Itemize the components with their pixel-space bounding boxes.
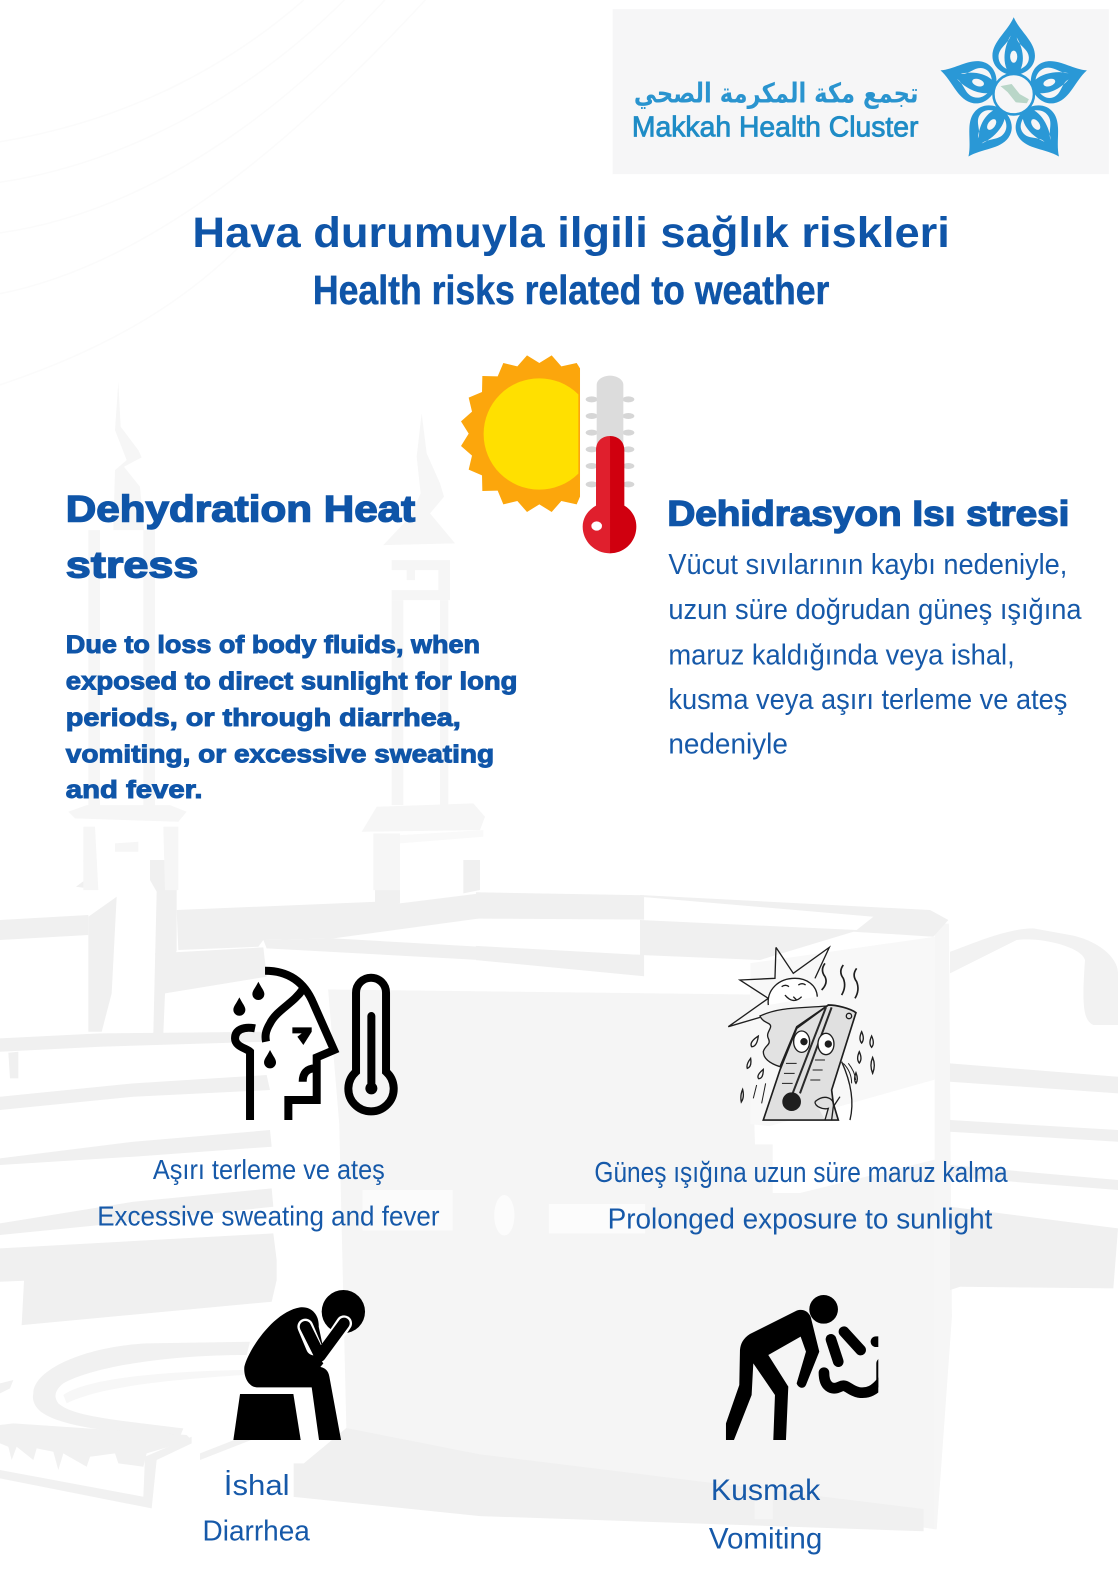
left body text: vomiting, or excessive sweating (66, 741, 494, 769)
watermark: left side colonnade bands (0, 860, 480, 1325)
heat waves (822, 963, 858, 998)
right body text: kusma veya aşırı terleme ve ateş (668, 684, 1067, 716)
background: Kaaba and mosque watermark (0, 382, 1118, 1531)
logo panel: Makkah Health Cluster (613, 9, 1109, 174)
left heading: Dehydration Heat stress: Dehydration Heat (66, 488, 416, 530)
right body text: uzun süre doğrudan güneş ışığına (668, 594, 1082, 626)
icon: sun and thermometer (461, 355, 636, 553)
sun with rays (728, 947, 829, 1027)
icon: person sitting with head in hands (233, 1290, 365, 1440)
caption: diarrhea (203, 1470, 310, 1547)
caption: vomiting: Kusmak (711, 1474, 821, 1507)
right body text (668, 549, 1082, 760)
caption: excessive sweating and fever: Excessive sweating and fever (97, 1200, 440, 1231)
left heading: Dehydration Heat stress: stress (66, 543, 198, 585)
icon: sweating thermometer cartoon under sun (728, 947, 874, 1120)
icon: five petal star emblem (934, 17, 1093, 169)
background: faint curved lines (0, 0, 425, 385)
caption: prolonged exposure to sunlight: Güneş ışığına uzun süre maruz kalma (594, 1157, 1008, 1189)
sweat drops (741, 1032, 874, 1102)
caption: diarrhea: Diarrhea (203, 1515, 310, 1547)
logo English name: Makkah Health Cluster (632, 112, 919, 144)
left body text: and fever. (66, 776, 203, 804)
watermark: courtyard ring at lower left (0, 1342, 277, 1508)
caption: vomiting (709, 1474, 822, 1556)
icon: person vomiting (726, 1295, 882, 1440)
logo Arabic name: تجمع مكة المكرمة الصحي (634, 78, 919, 109)
caption: excessive sweating and fever (97, 1154, 440, 1231)
left body text: Due to loss of body fluids, when (66, 631, 480, 659)
left body text: periods, or through diarrhea, (66, 704, 461, 732)
caption: diarrhea: İshal (224, 1470, 290, 1502)
right body text: nedeniyle (668, 728, 788, 760)
caption: vomiting: Vomiting (709, 1523, 822, 1556)
right body text: maruz kaldığında veya ishal, (668, 639, 1015, 671)
watermark: Kaaba front and right faces (294, 892, 952, 1531)
title: Turkish: Hava durumuyla ilgili sağlık riskleri (192, 209, 950, 257)
watermark: right side arch and bands (640, 895, 1118, 1290)
left body text (66, 631, 517, 804)
icon: thermometer (583, 376, 636, 553)
right heading: Dehidrasyon Isı stresi: Dehidrasyon Isı stresi (667, 494, 1069, 534)
title: English: Health risks related to weather (313, 267, 830, 313)
icon: sun (461, 355, 580, 512)
thermometer character (763, 1005, 856, 1120)
watermark: left and right minarets (68, 382, 485, 890)
caption: prolonged exposure to sunlight: Prolonged exposure to sunlight (608, 1203, 993, 1235)
caption: prolonged exposure to sunlight (594, 1157, 1008, 1235)
caption: excessive sweating and fever: Aşırı terleme ve ateş (153, 1154, 385, 1185)
right body text: Vücut sıvılarının kaybı nedeniyle, (668, 549, 1067, 581)
icon: sweating face and thermometer (233, 971, 394, 1120)
towel (760, 1006, 827, 1067)
left heading: Dehydration Heat stress (66, 488, 416, 585)
left body text: exposed to direct sunlight for long (66, 668, 517, 696)
